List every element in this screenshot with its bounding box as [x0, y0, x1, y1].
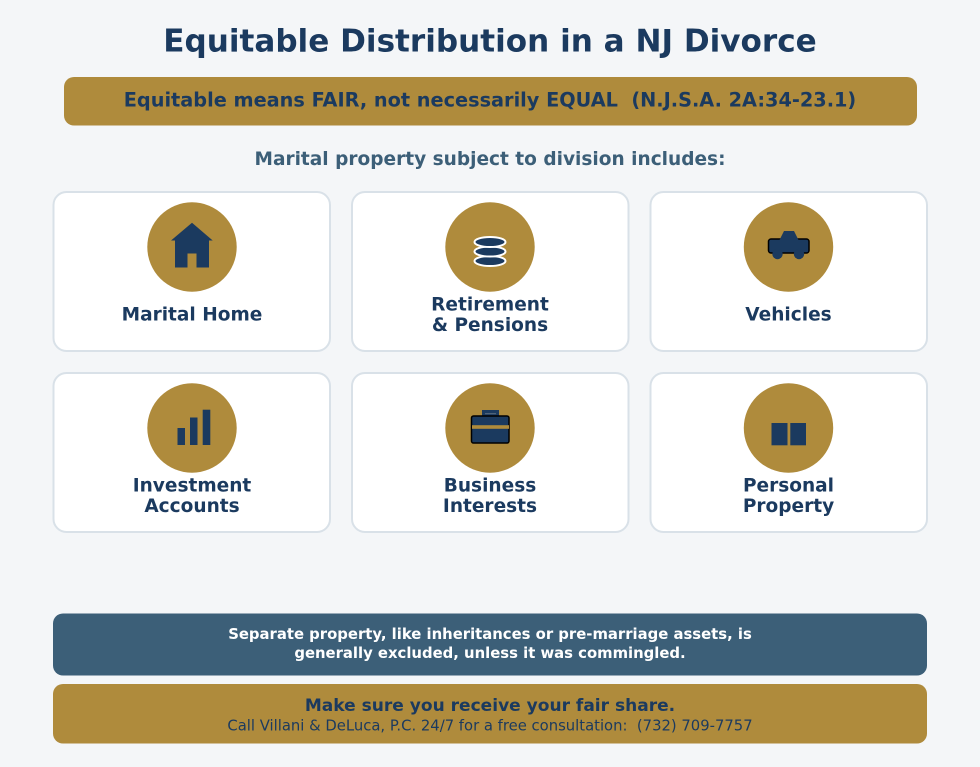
panel: personal property	[650, 373, 927, 532]
icon: coin stack	[445, 202, 535, 292]
label: personal property: Property	[743, 496, 834, 517]
label: retirement and pensions: Retirement	[431, 294, 549, 316]
label: business interests: Interests	[443, 496, 537, 517]
label: business interests: Business	[444, 476, 536, 496]
panel: business interests	[352, 373, 628, 532]
callout: separate property: Separate property, like inheritances or pre-marriage assets, is	[228, 626, 752, 643]
panel: vehicles	[650, 192, 927, 351]
label: retirement and pensions: & Pensions	[432, 315, 548, 336]
title: Equitable Distribution in a NJ Divorce	[163, 24, 817, 60]
subheading: Marital property subject to division includes:	[254, 149, 726, 170]
label: investment accounts: Investment	[133, 476, 251, 496]
icon: briefcase	[445, 383, 535, 473]
icon: house	[147, 202, 237, 292]
banner: equitable means fair: Equitable means FAIR, not necessarily EQUAL (N.J.S.A. 2A:34-23.1)	[124, 88, 856, 112]
label: investment accounts: Accounts	[144, 496, 240, 517]
call to action	[53, 684, 927, 744]
icon: car	[744, 202, 833, 292]
label: vehicles: Vehicles	[745, 304, 832, 326]
icon: bar chart	[147, 383, 237, 473]
icon: boxes	[744, 383, 833, 473]
callout: separate property: generally excluded, unless it was commingled.	[294, 645, 686, 662]
panel: marital home	[54, 192, 330, 351]
callout: separate property	[53, 614, 927, 676]
label: marital home: Marital Home	[122, 304, 262, 326]
label: personal property: Personal	[743, 476, 834, 496]
panel: investment accounts	[54, 373, 330, 532]
call to action: Make sure you receive your fair share.	[305, 696, 675, 716]
panel: retirement and pensions	[352, 192, 628, 351]
call to action: Call Villani & DeLuca, P.C. 24/7 for a free consultation: (732) 709-7757	[227, 718, 753, 734]
banner: equitable means fair	[64, 77, 917, 126]
